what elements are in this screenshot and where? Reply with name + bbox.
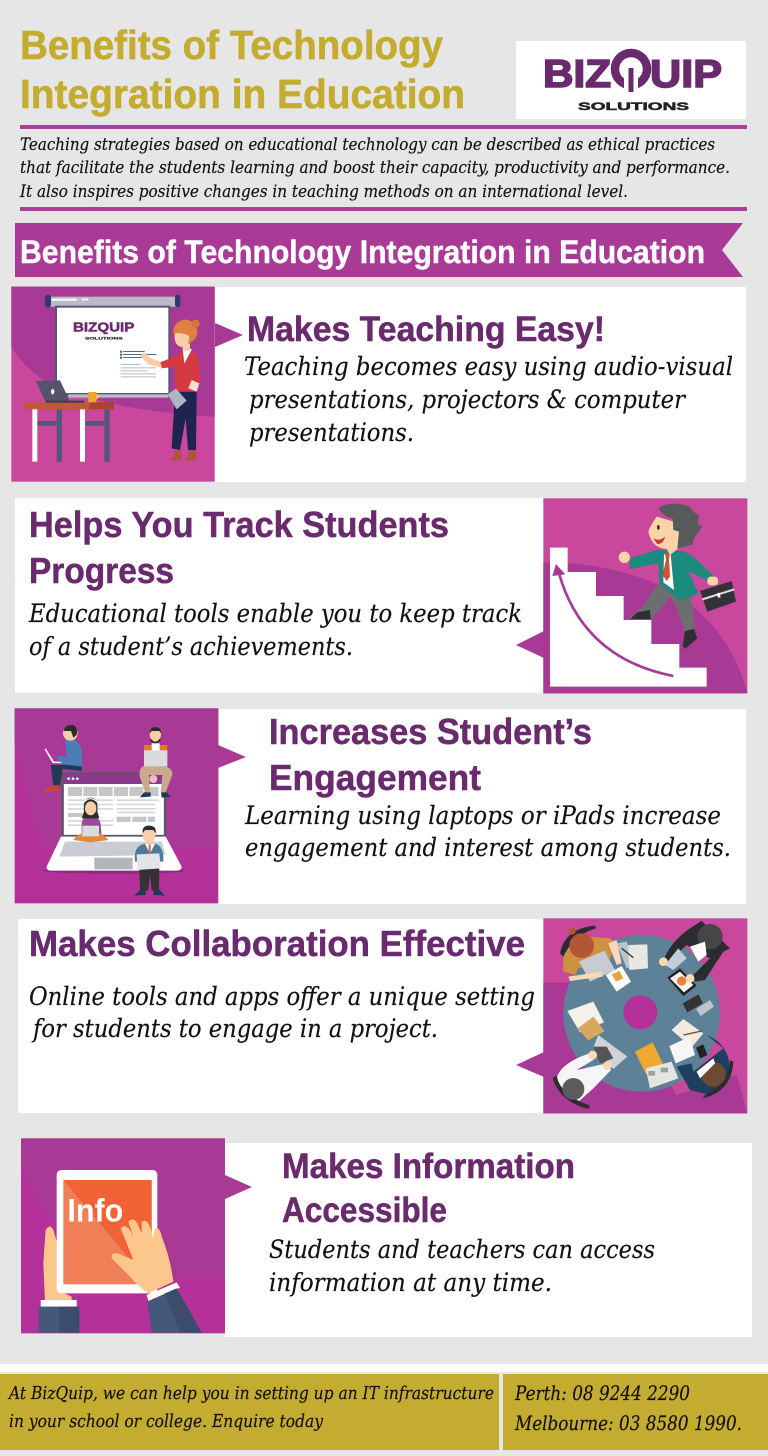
section banner: Benefits of Technology Integration in Education (20, 234, 705, 270)
panel: makes collaboration effective (18, 918, 747, 1113)
pointer (516, 631, 544, 658)
heading: Makes Collaboration Effective (29, 923, 525, 964)
body text: Learning using laptops or iPads increase (244, 801, 721, 830)
body text (269, 1235, 655, 1297)
body text: engagement and interest among students. (245, 833, 731, 862)
body text: presentations, projectors & computer (249, 385, 687, 414)
intro text (19, 135, 730, 202)
body text (28, 599, 522, 661)
footer: enquiry message: At BizQuip, we can help you in setting up an IT infrastructure (7, 1383, 494, 1404)
panel: makes information accessible (21, 1138, 752, 1337)
body text: Online tools and apps offer a unique setting (29, 982, 535, 1011)
illustration: tablet with info screen: Info (67, 1193, 123, 1229)
pointer (225, 1175, 252, 1199)
heading (282, 1147, 575, 1230)
footer: contact numbers (503, 1374, 768, 1450)
illustration: tablet with info screen (21, 1138, 225, 1333)
logo: BizQuip Solutions: UIP (650, 53, 722, 96)
section banner (15, 223, 743, 277)
body text: presentations. (249, 418, 414, 447)
heading: Progress (29, 550, 174, 591)
title: Benefits of Technology (20, 22, 443, 68)
illustration: man climbing stairs (543, 498, 747, 693)
panel: makes teaching easy (11, 287, 746, 482)
illustration: teacher presenting: BIZQUIP (73, 320, 134, 335)
pointer (516, 1052, 544, 1077)
footer: enquiry message (0, 1374, 499, 1450)
body text: Students and teachers can access (269, 1235, 655, 1264)
illustration: teacher presenting: SOLUTIONS (85, 336, 123, 341)
heading (29, 504, 449, 591)
body text: of a student’s achievements. (29, 632, 353, 661)
illustration: teacher presenting (11, 287, 215, 482)
body text: Educational tools enable you to keep track (28, 599, 522, 628)
heading: Makes Information (282, 1147, 575, 1186)
logo: BizQuip Solutions: SOLUTIONS (578, 101, 689, 113)
heading: Accessible (282, 1191, 447, 1230)
logo: BizQuip Solutions: BIZ (543, 53, 611, 96)
body text: for students to engage in a project. (31, 1014, 438, 1043)
heading: Makes Teaching Easy! (247, 310, 605, 349)
body text (29, 982, 535, 1043)
heading: Helps You Track Students (29, 504, 449, 545)
intro text: It also inspires positive changes in teaching methods on an international level. (19, 182, 628, 202)
heading (269, 711, 592, 798)
title (20, 22, 465, 117)
pointer (218, 745, 246, 768)
panel: helps you track students progress (15, 498, 747, 693)
title: Integration in Education (20, 71, 465, 117)
footer: contact numbers: Perth: 08 9244 2290 (514, 1381, 690, 1405)
footer: enquiry message: in your school or college. Enquire today (9, 1411, 324, 1432)
body text: information at any time. (269, 1268, 552, 1297)
body text: Teaching becomes easy using audio-visual (244, 352, 733, 381)
pointer (215, 323, 243, 347)
body text (244, 352, 733, 447)
body text (244, 801, 731, 862)
heading: Increases Student’s (269, 711, 592, 752)
panel: increases student's engagement (15, 708, 746, 904)
logo: BizQuip Solutions (516, 41, 746, 119)
illustration: team around a table (543, 918, 747, 1113)
heading: Engagement (269, 757, 481, 798)
illustration: students on laptop (15, 708, 218, 903)
